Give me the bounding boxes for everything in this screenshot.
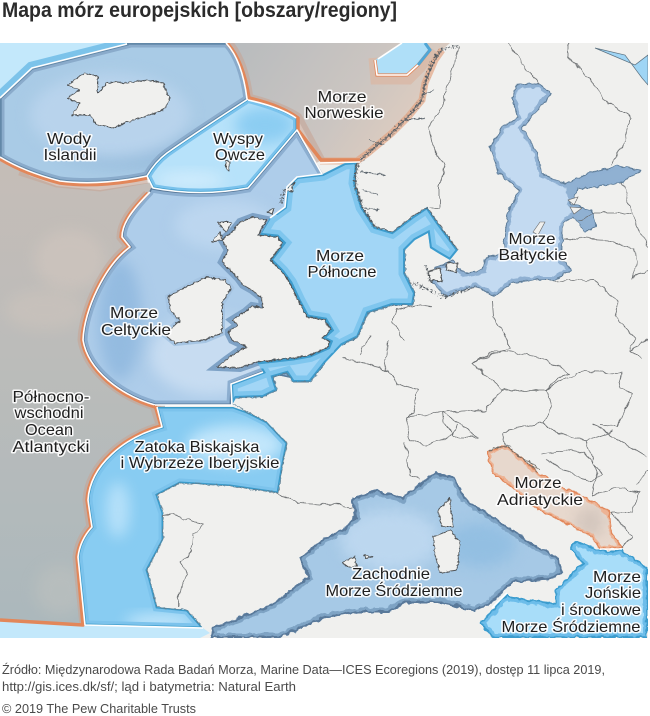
panel: Arctic corner xyxy=(0,43,127,97)
label: Morze Jońskie xyxy=(502,569,641,636)
islands xyxy=(67,73,460,573)
panel: north-east Atlantic xyxy=(0,150,165,628)
label: Wody Islandii: Islandii xyxy=(44,147,96,164)
label: Morze Bałtyckie xyxy=(498,231,568,264)
panel: North Sea xyxy=(217,162,458,405)
label: Morze Północne: Morze xyxy=(316,248,364,265)
label: Morze Bałtyckie: Morze xyxy=(508,231,556,248)
label: Morze Adriatyckie xyxy=(497,475,583,509)
icon: Great Britain xyxy=(217,217,331,368)
Corsica and Sardinia xyxy=(433,498,460,573)
label: Morze Bałtyckie: Bałtyckie xyxy=(498,247,568,264)
label: Morze Norweskie: Morze xyxy=(318,89,367,106)
panel: Adriatic Sea xyxy=(488,447,623,549)
land background xyxy=(147,43,648,638)
Danish islands xyxy=(428,262,458,282)
country borders xyxy=(163,43,648,607)
label: North-east Atlantic xyxy=(12,389,90,456)
label: Zatoka Biskajska xyxy=(120,439,280,472)
label: Morze Jońskie: Morze Śródziemne xyxy=(502,617,641,636)
label: Zachodnie Morze Śródziemne: Morze Śródziemne xyxy=(326,581,463,600)
label: Zachodnie Morze Śródziemne xyxy=(326,566,463,600)
panel: Iceland waters xyxy=(0,43,248,183)
label: North-east Atlantic: wschodni xyxy=(13,405,83,422)
label: Morze Celtyckie xyxy=(101,305,171,339)
source note xyxy=(2,662,605,694)
label: Morze Adriatyckie: Adriatyckie xyxy=(497,492,583,509)
label: Wody Islandii: Wody xyxy=(47,131,91,148)
label: Morze Północne xyxy=(308,248,377,281)
label: Morze Północne: Północne xyxy=(308,264,377,281)
label: Morze Norweskie xyxy=(304,89,384,122)
label: Morze Celtyckie: Celtyckie xyxy=(101,322,171,339)
panel: inset Barents sea xyxy=(375,43,430,75)
label: North-east Atlantic: Atlantycki xyxy=(12,439,90,456)
icon: Ireland xyxy=(165,277,231,343)
label: Wyspy Owcze: Wyspy xyxy=(213,131,263,148)
Faroes xyxy=(226,160,230,171)
boundary: Iceland and Atlantic xyxy=(0,157,147,185)
boundary: Biscay and Atlantic xyxy=(0,372,263,628)
panel: Baltic Sea xyxy=(432,83,642,297)
label: Wody Islandii xyxy=(44,131,96,164)
icon: Iceland xyxy=(67,73,170,128)
label: Zachodnie Morze Śródziemne: Zachodnie xyxy=(352,566,430,583)
Balearics xyxy=(342,555,372,567)
label: Morze Norweskie: Norweskie xyxy=(304,105,384,122)
panel: White Sea xyxy=(595,48,648,85)
label: Morze Celtyckie: Morze xyxy=(110,305,158,322)
labels xyxy=(12,89,641,636)
panel: Ionian and central Mediterranean xyxy=(480,540,648,638)
boundary: Celtic and Atlantic xyxy=(82,192,155,407)
boundary: internal white lines xyxy=(0,44,622,608)
label: Zatoka Biskajska: i Wybrzeże Iberyjskie xyxy=(120,455,280,472)
panel: Western Mediterranean xyxy=(210,472,563,638)
label: Zatoka Biskajska: Zatoka Biskajska xyxy=(134,439,260,456)
jagged Norwegian and Danish coast xyxy=(228,46,475,297)
label: Wyspy Owcze xyxy=(213,131,265,164)
label: Morze Jońskie: Morze xyxy=(593,569,641,586)
panel: Atlantic south strip xyxy=(0,620,210,638)
source note: Źródło: Międzynarodowa Rada Badań Morza, Marine Data—ICES Ecoregions (2019), dostęp 11 lipca 2019, xyxy=(2,662,605,677)
label: Morze Jońskie: i środkowe xyxy=(561,602,641,619)
region boundaries xyxy=(0,43,622,628)
label: North-east Atlantic: Ocean xyxy=(25,422,73,439)
panel: Bay of Biscay and Iberian coast xyxy=(78,407,287,630)
coastlines xyxy=(147,50,540,628)
Hebrides and Shetland xyxy=(212,182,294,242)
panel: Celtic Seas xyxy=(83,130,340,405)
copyright: © 2019 The Pew Charitable Trusts xyxy=(2,701,196,716)
Baltic islands xyxy=(533,197,582,235)
panel: Faroe Islands xyxy=(147,99,297,192)
panel: Norwegian Sea xyxy=(227,43,450,161)
label: North-east Atlantic: Północno- xyxy=(12,389,90,406)
boundary: Norwegian Sea xyxy=(226,43,360,163)
label: Morze Jońskie: Jońskie xyxy=(585,585,641,602)
source note: http://gis.ices.dk/sf/; ląd i batymetria: Natural Earth xyxy=(2,679,296,694)
label: Wyspy Owcze: Owcze xyxy=(215,147,265,164)
label: Morze Adriatyckie: Morze xyxy=(514,475,562,492)
